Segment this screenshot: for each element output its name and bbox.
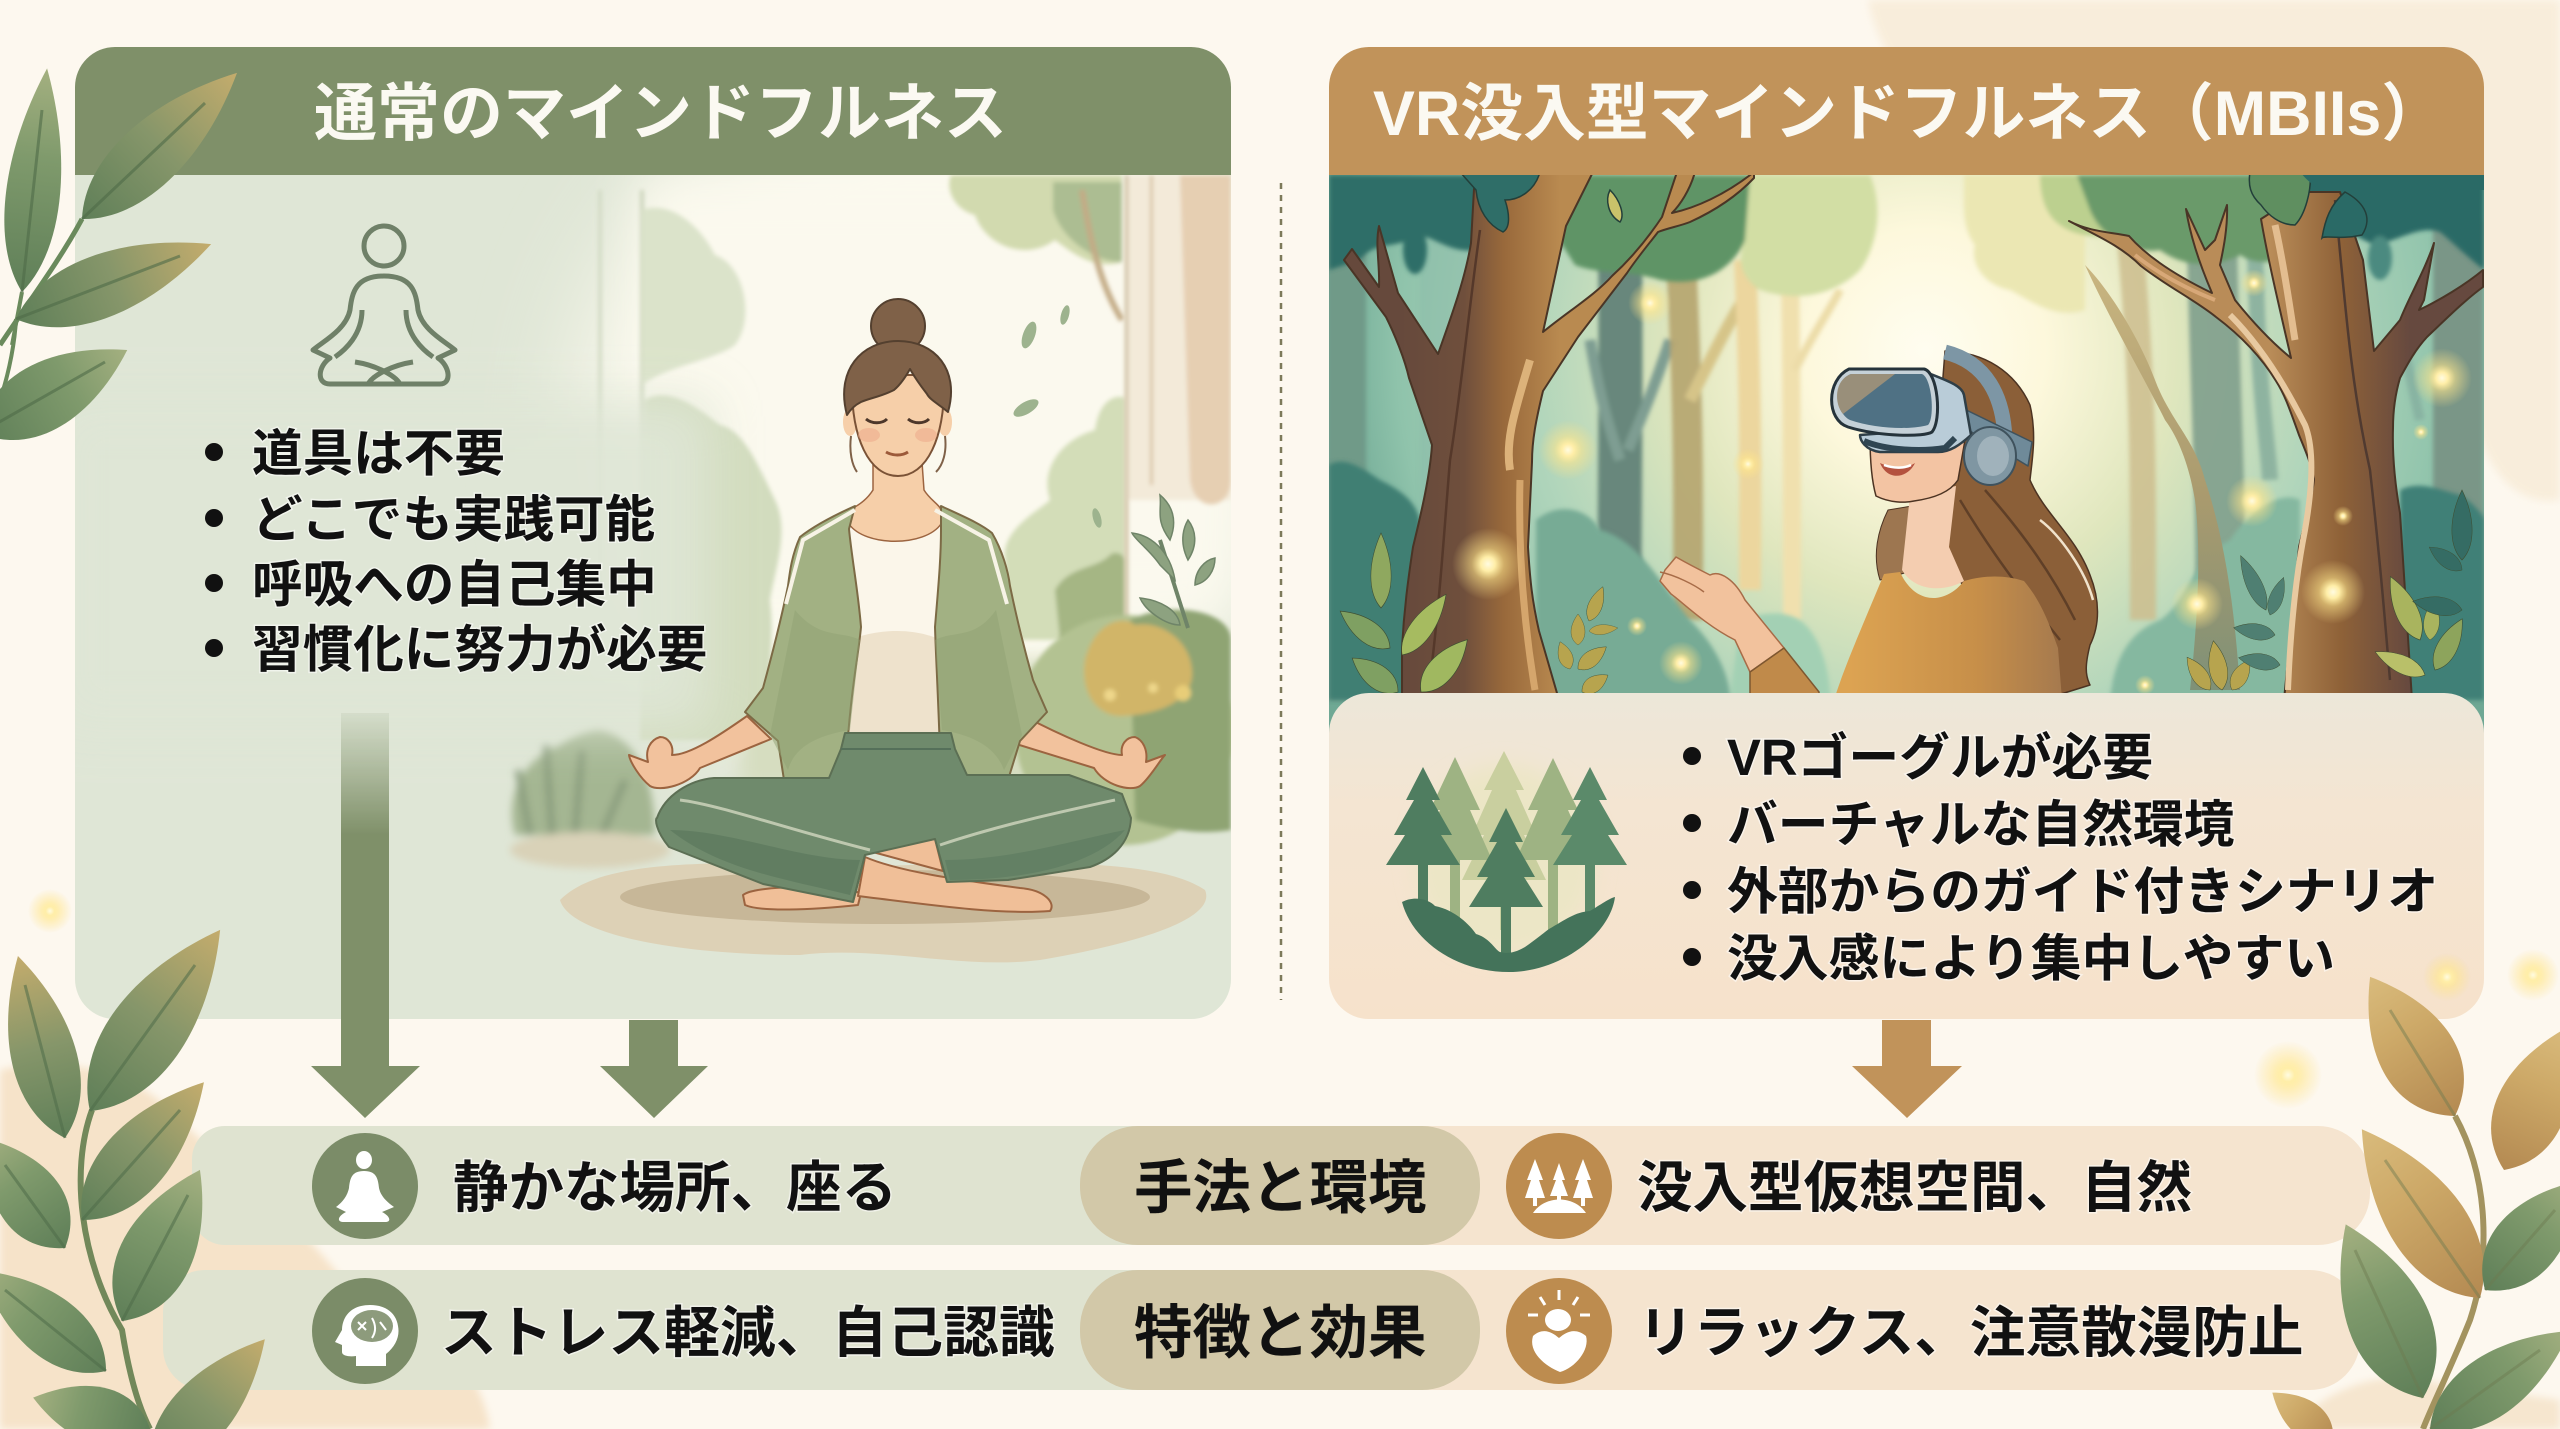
headset strap — [1945, 352, 2005, 445]
mid tan tree — [2085, 265, 2240, 690]
center label pill — [1080, 1270, 1480, 1390]
background trees — [598, 175, 1125, 740]
bullet list: left: 道具は不要 — [252, 425, 505, 482]
illustration: person meditating in a garden — [508, 175, 1231, 962]
feet — [743, 839, 1052, 912]
shirt — [849, 524, 941, 733]
canopy overlapping trunks — [1460, 172, 2490, 238]
arrow: right — [1852, 1020, 1962, 1118]
icon: forest on hill — [1506, 1133, 1612, 1239]
bullet list: right: 外部からのガイド付きシナリオ — [1727, 863, 2438, 920]
panel body: left — [75, 175, 1231, 1019]
arrow: long left — [311, 713, 420, 1118]
glowing dots — [28, 889, 2559, 1109]
large trees — [1344, 172, 2483, 700]
bullet list: left: どこでも実践可能 — [252, 491, 655, 548]
arrow: short left — [600, 1020, 708, 1118]
leaf branch: bottom left — [0, 908, 288, 1429]
icon: forest circle — [1386, 751, 1627, 972]
header: right — [1329, 47, 2484, 175]
right bushes — [1015, 610, 1235, 845]
bullet list: right: 没入感により集中しやすい — [1727, 930, 2335, 987]
bullet list: right: バーチャルな自然環境 — [1727, 796, 2235, 853]
header: left — [75, 47, 1231, 175]
pants — [656, 733, 1131, 902]
small leafy plant — [1132, 495, 1215, 628]
bullet list: left — [205, 425, 707, 678]
neck — [849, 462, 941, 541]
left row text: ストレス軽減、自己認識 — [441, 1301, 1055, 1364]
right row text: 没入型仮想空間、自然 — [1637, 1157, 2192, 1219]
icon: white meditating figure — [312, 1133, 418, 1239]
header: right: VR没入型マインドフルネス（MBIIs） — [1373, 79, 2444, 149]
leaf branch: bottom right — [2261, 957, 2560, 1429]
ground shadow — [560, 863, 1206, 962]
bullet list: right: VRゴーグルが必要 — [1727, 729, 2153, 786]
text area sage fade — [544, 388, 718, 760]
right row bar — [1420, 1270, 2360, 1390]
hair — [1935, 351, 2098, 695]
cardigan — [745, 506, 1047, 780]
icon: meditation outline — [313, 226, 455, 384]
comparison row: method and environment — [192, 1126, 2370, 1245]
center label pill: 特徴と効果 — [1134, 1301, 1427, 1366]
left row bar — [163, 1270, 1150, 1390]
falling leaves — [1011, 304, 1103, 529]
arms skin — [629, 716, 1165, 788]
left row bar — [192, 1126, 1150, 1245]
far background trunks — [1329, 229, 2484, 622]
woman — [629, 299, 1165, 912]
undergrowth — [1329, 462, 2484, 700]
leaf branch: top left — [0, 50, 259, 462]
panel: conventional mindfulness — [50, 47, 1280, 1019]
fireflies — [1452, 269, 2472, 695]
icon: sun over heart — [1506, 1278, 1612, 1384]
right row text: リラックス、注意散漫防止 — [1638, 1302, 2303, 1364]
wooden pillar — [1125, 175, 1231, 625]
center dashed divider — [1280, 183, 1282, 1000]
raised hand and arm — [1660, 557, 1784, 672]
head — [843, 299, 952, 476]
goggles — [1860, 371, 1971, 452]
header: left: 通常のマインドフルネス — [314, 79, 1007, 149]
comparison row: features and effects — [163, 1270, 2360, 1390]
left row text: 静かな場所、座る — [453, 1157, 897, 1219]
light background wash — [562, 175, 1231, 777]
icon: head with brain — [312, 1278, 418, 1384]
sweater — [1834, 572, 2062, 700]
bullet list: left: 習慣化に努力が必要 — [252, 621, 707, 678]
bullet list: left: 呼吸への自己集中 — [252, 556, 657, 613]
text panel: right — [1329, 693, 2484, 1019]
neck and face — [1902, 486, 1964, 588]
headphone — [1964, 427, 2016, 485]
left grass — [510, 730, 670, 868]
center label pill: 手法と環境 — [1134, 1156, 1427, 1221]
woman with VR headset — [1660, 351, 2098, 700]
right row bar — [1420, 1126, 2370, 1245]
bullet list: right — [1683, 729, 2438, 987]
canopy — [1329, 175, 2484, 313]
illustration: forest with VR user — [1329, 172, 2490, 735]
foreground plants — [1333, 490, 2472, 702]
center label pill — [1080, 1126, 1480, 1245]
panel: VR immersive mindfulness — [1329, 47, 2490, 1019]
